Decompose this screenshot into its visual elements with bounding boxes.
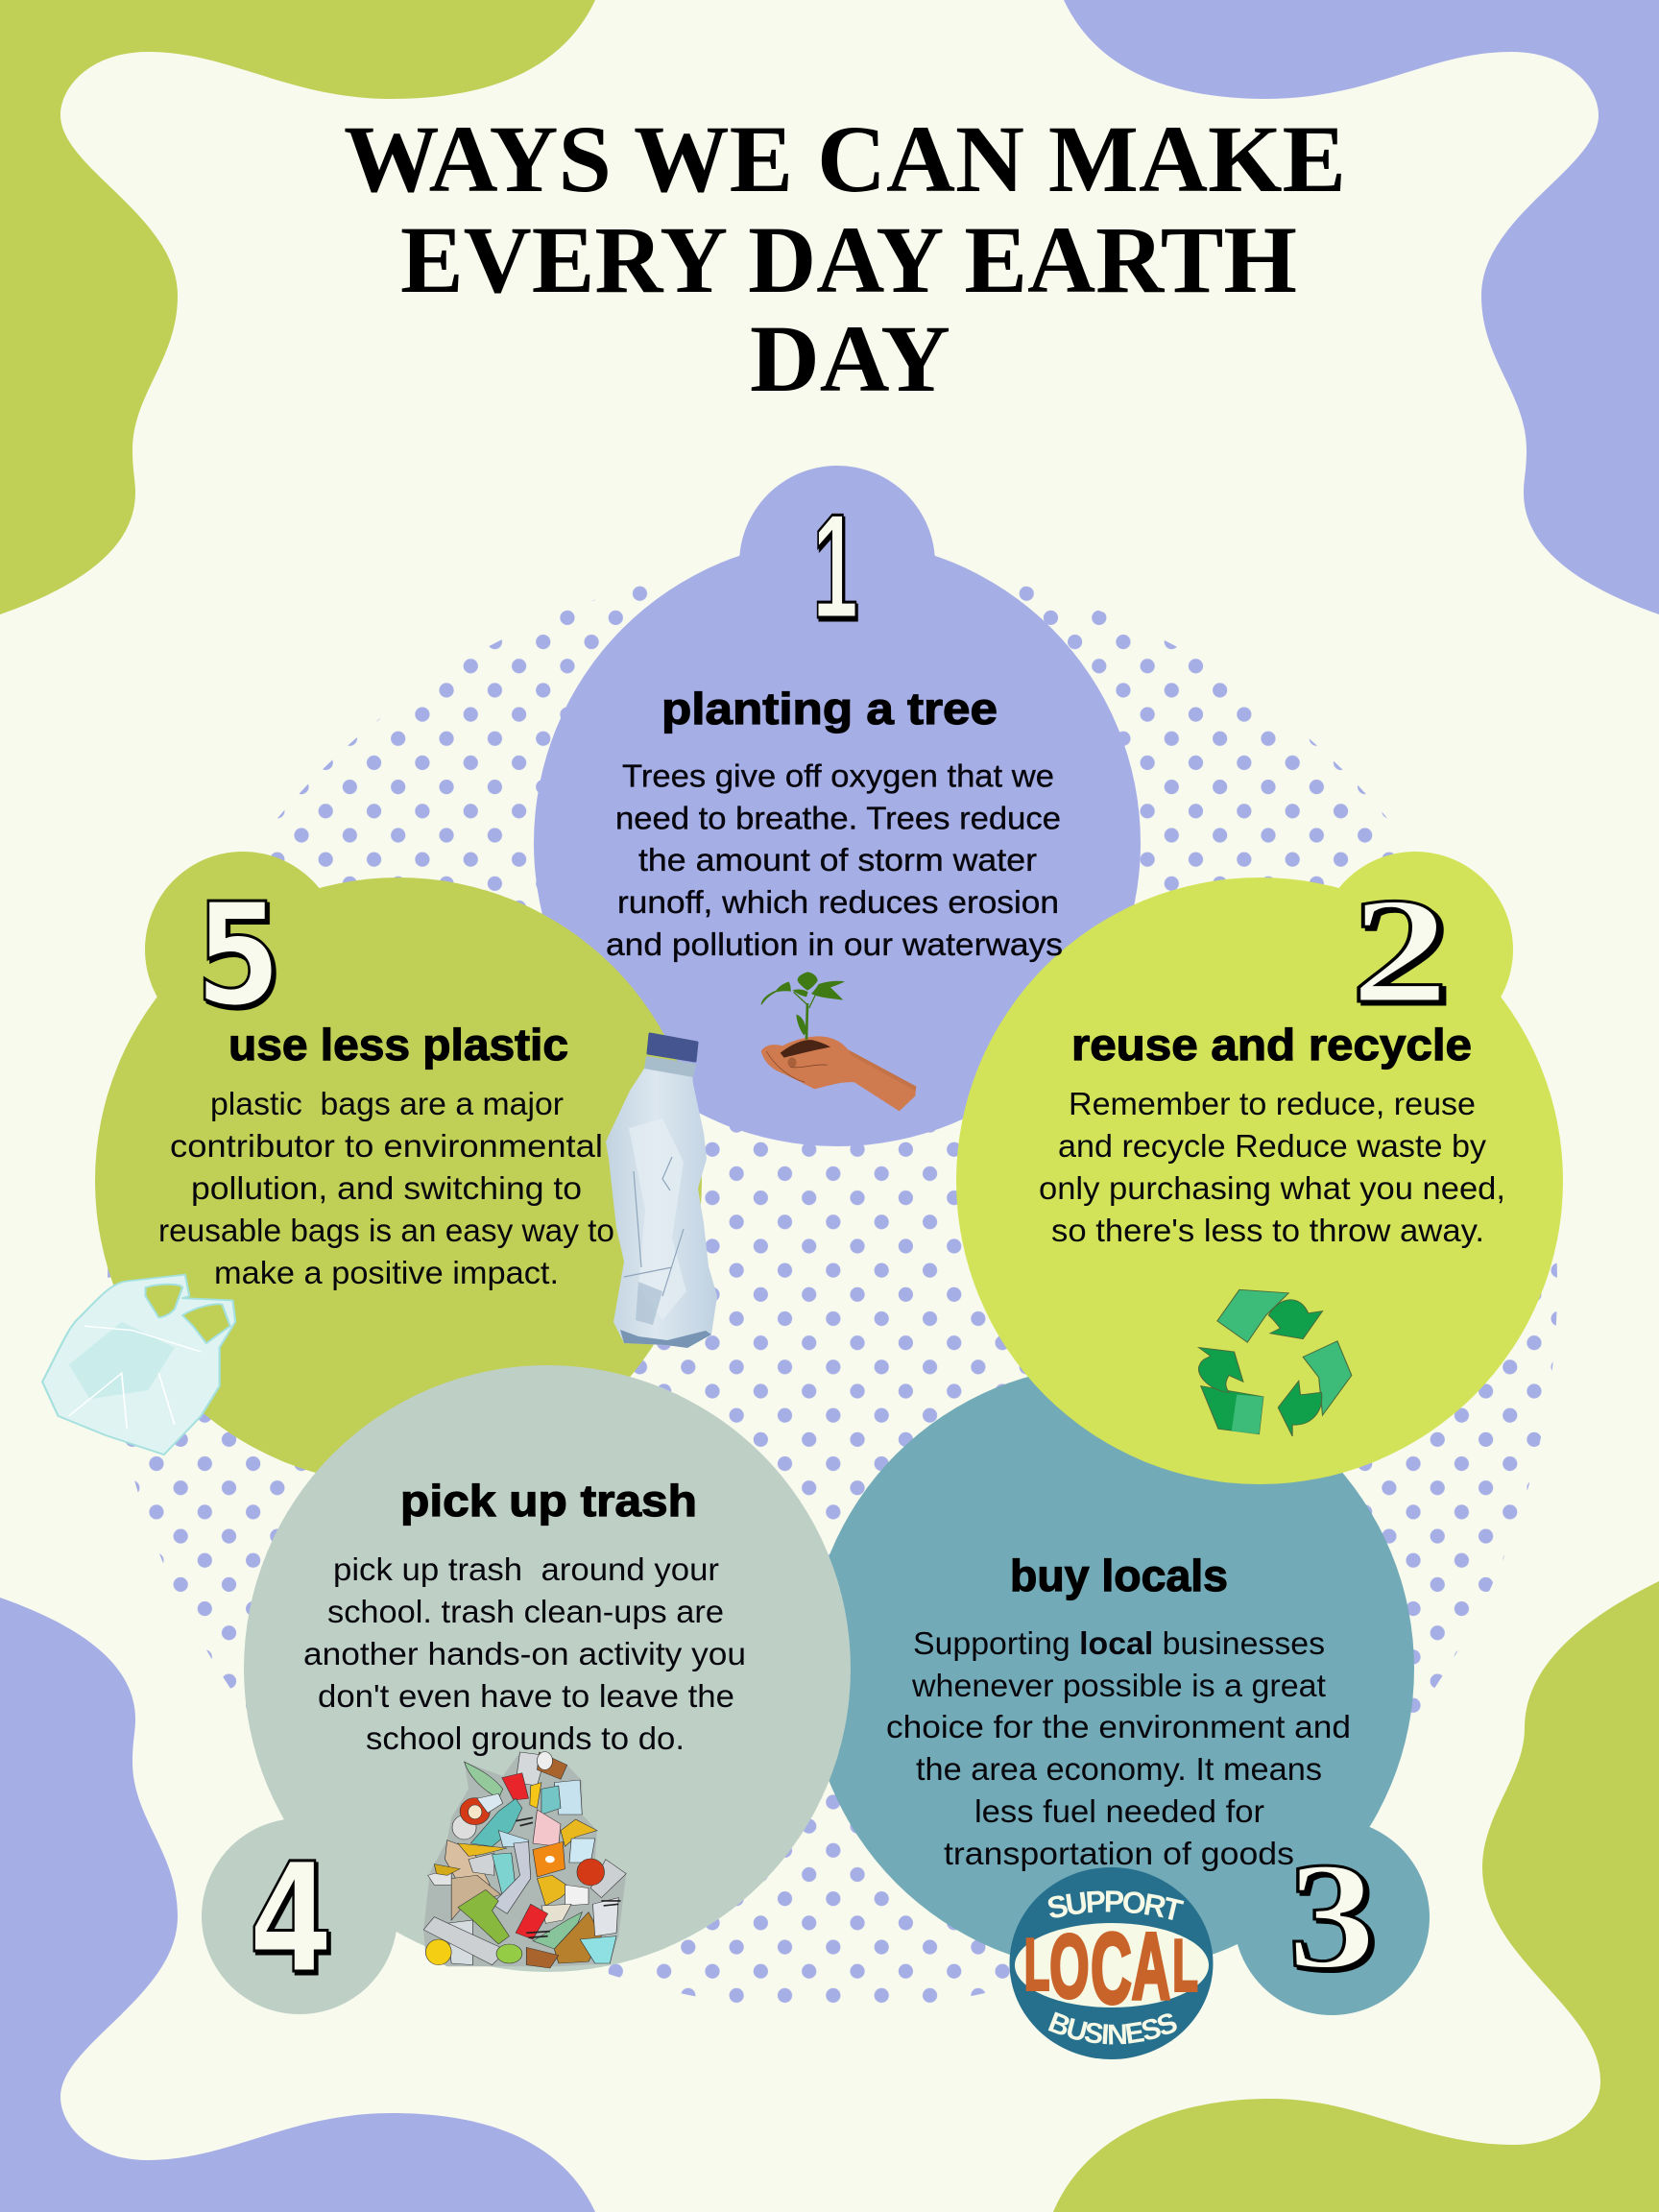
badge word: LOCAL bbox=[1024, 1911, 1198, 2024]
badge word: LOCAL: C bbox=[1091, 1911, 1132, 2024]
panel shape: 2 reuse and recycle bbox=[956, 852, 1563, 1484]
panel shape: 5 use less plastic bbox=[95, 852, 702, 1484]
title bbox=[344, 106, 1346, 412]
text: buy locals: whenever possible is a great bbox=[911, 1668, 1326, 1703]
icon: recycle symbol bbox=[1198, 1289, 1352, 1436]
text: reuse and recycle: and recycle Reduce waste by bbox=[1058, 1128, 1487, 1164]
blob: top right purple bbox=[1064, 0, 1659, 614]
text: pick up trash: school. trash clean-ups are bbox=[327, 1594, 724, 1629]
text: use less plastic: pollution, and switching to bbox=[191, 1170, 582, 1206]
panel shape: 3 buy locals bbox=[807, 1365, 1430, 2015]
text: use less plastic: reusable bags is an easy way to bbox=[158, 1213, 614, 1248]
text: reuse and recycle: only purchasing what you need, bbox=[1039, 1170, 1505, 1206]
heading: pick up trash: pick up trash bbox=[400, 1476, 697, 1526]
icon: trash pile bbox=[423, 1752, 626, 1968]
panel shape: 4 pick up trash bbox=[202, 1365, 851, 2014]
title: WAYS WE CAN MAKE bbox=[344, 106, 1346, 212]
blob: top left green bbox=[0, 0, 595, 614]
number 3: 3 bbox=[1287, 1831, 1376, 2001]
text: buy locals: less fuel needed for bbox=[974, 1793, 1264, 1829]
title: DAY bbox=[750, 305, 950, 412]
icon: plastic bag bbox=[42, 1275, 235, 1455]
text: buy locals: the area economy. It means bbox=[916, 1751, 1322, 1787]
text: use less plastic: make a positive impact. bbox=[214, 1255, 559, 1290]
text: pick up trash bbox=[303, 1551, 746, 1756]
heading: buy locals: buy locals bbox=[1010, 1551, 1228, 1600]
text: reuse and recycle: so there's less to throw away. bbox=[1051, 1213, 1484, 1248]
heading: planting a tree: planting a tree bbox=[661, 684, 998, 733]
text: use less plastic: contributor to environmental bbox=[170, 1128, 603, 1164]
panel shape: 1 planting a tree bbox=[534, 466, 1141, 1146]
number 2: 2 bbox=[1351, 866, 1449, 1034]
icon: plant in hand bbox=[761, 972, 916, 1111]
badge word: LOCAL: O bbox=[1049, 1916, 1089, 2017]
text: planting a tree: Trees give off oxygen that we bbox=[622, 758, 1054, 793]
badge word: SUPPORT: SUPPORT bbox=[1048, 1890, 1185, 1920]
text: buy locals: choice for the environment and bbox=[886, 1709, 1351, 1744]
text: pick up trash: another hands-on activity you bbox=[303, 1636, 746, 1671]
text: pick up trash: don't even have to leave the bbox=[318, 1678, 734, 1714]
title: EVERY DAY EARTH bbox=[400, 206, 1297, 313]
text: buy locals: transportation of goods bbox=[944, 1836, 1294, 1871]
text: reuse and recycle bbox=[1039, 1086, 1505, 1248]
dotted background circle bbox=[108, 560, 1557, 2009]
badge circle bbox=[1010, 1867, 1214, 2059]
text: planting a tree: runoff, which reduces erosion bbox=[617, 884, 1059, 920]
heading: use less plastic: use less plastic bbox=[228, 1020, 568, 1070]
text: use less plastic: plastic bags are a major bbox=[210, 1086, 564, 1121]
text: planting a tree: the amount of storm water bbox=[638, 842, 1037, 878]
heading: reuse and recycle: reuse and recycle bbox=[1071, 1020, 1472, 1070]
text: buy locals bbox=[886, 1625, 1351, 1871]
text: use less plastic bbox=[158, 1086, 614, 1290]
blob: bottom right green bbox=[1053, 1581, 1659, 2212]
text: buy locals: Supporting local businesses bbox=[913, 1625, 1325, 1661]
text: reuse and recycle: Remember to reduce, reuse bbox=[1069, 1086, 1476, 1121]
text: pick up trash: school grounds to do. bbox=[366, 1720, 685, 1756]
badge word: BUSINESS: BUSINESS bbox=[1048, 2012, 1177, 2045]
badge word: LOCAL: L bbox=[1173, 1925, 1198, 2006]
text: pick up trash: pick up trash around your bbox=[333, 1551, 719, 1587]
text: planting a tree: need to breathe. Trees reduce bbox=[615, 801, 1061, 835]
number 1: 1 bbox=[812, 483, 858, 649]
text: planting a tree bbox=[606, 758, 1063, 962]
badge word: LOCAL: L bbox=[1024, 1924, 1049, 2005]
badge word: LOCAL: A bbox=[1132, 1914, 1170, 2019]
text: planting a tree: and pollution in our waterways bbox=[606, 926, 1063, 962]
badge lens bbox=[1015, 1923, 1209, 2008]
number 4: 4 bbox=[249, 1830, 333, 2008]
number 5: 5 bbox=[195, 872, 281, 1038]
icon: crumpled plastic bottle bbox=[606, 1034, 717, 1348]
blob: bottom left purple bbox=[0, 1598, 595, 2212]
badge: support local business bbox=[1010, 1867, 1214, 2059]
